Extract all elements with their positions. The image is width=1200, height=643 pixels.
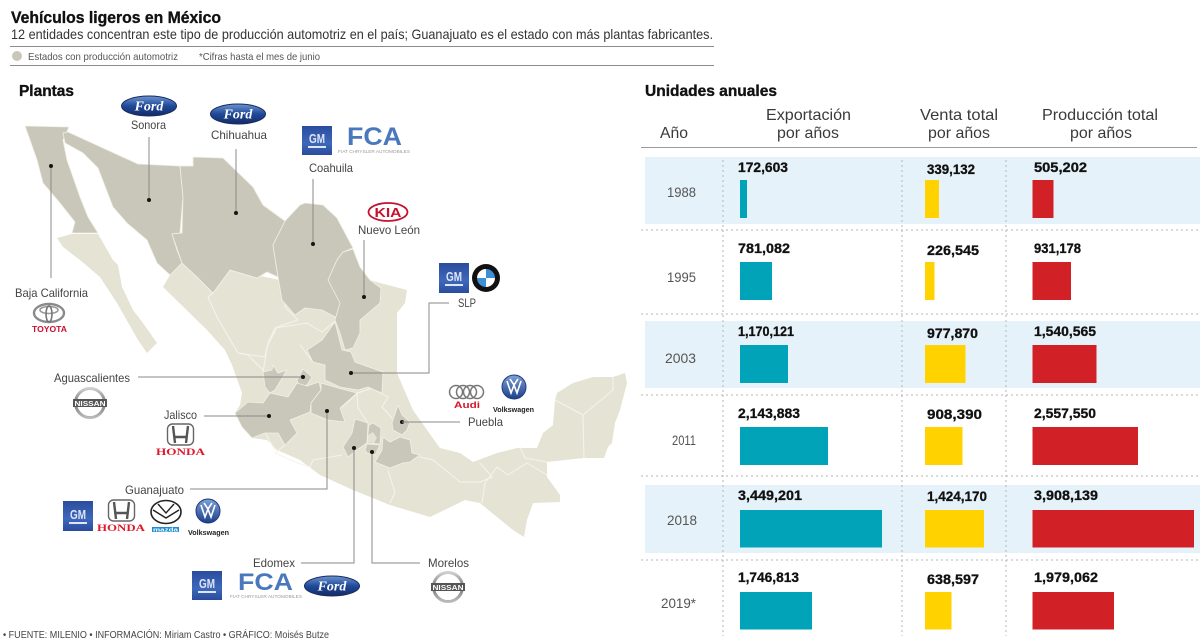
logo: GM: GM [199,576,215,591]
state: Puebla north [392,405,410,435]
logo: KIA: KIA [374,205,402,220]
export value: 1,746,813 [738,569,799,585]
callout: Sonora [122,96,176,202]
label: SLP [458,296,476,310]
logo: Ford [304,576,360,596]
sales value: 226,545 [927,242,979,258]
panel: annual units table [641,83,1200,636]
export bar [740,345,788,383]
heading: Plantas: Plantas [19,83,74,100]
footer credits: • FUENTE: MILENIO • INFORMACIÓN: Miriam Castro • GRÁFICO: Moisés Butze [3,628,329,641]
leader [190,411,327,489]
label: Chihuahua [211,128,267,142]
export bar [740,510,882,548]
state: Chihuahua [172,157,285,293]
column header: Exportación [766,107,851,142]
dot [301,375,305,379]
state: Edomex east [368,423,381,444]
logo: Nissan [73,388,107,418]
export value: 781,082 [738,240,790,256]
leader [402,421,460,423]
export value: 172,603 [738,159,788,175]
sales value: 638,597 [927,571,979,587]
logo: BMW [472,264,500,292]
mainland light states [163,263,627,537]
legend footnote: *Cifras hasta el mes de junio [199,51,320,63]
row: 2019 [661,569,1114,630]
label: Guanajuato [125,483,184,497]
production bar [1032,592,1114,630]
leader [372,452,420,563]
column header: Venta total [920,107,998,142]
dot [49,164,53,168]
logo: GM [63,501,93,531]
logo: Volkswagen: Volkswagen [493,405,534,414]
subtitle: 12 entidades concentran este tipo de producción automotriz en el país; Guanajuato es el estado con más plantas fabricantes. [11,26,713,42]
sales bar [925,262,934,300]
export bar [740,592,812,630]
year: 2011 [672,432,696,448]
callout: Aguascalientes [54,371,305,418]
column header: Exportación: por años [777,125,839,142]
row: 1988 [667,159,1087,218]
logo: Toyota: TOYOTA [32,325,67,334]
label: Nuevo León [358,223,420,237]
dot [400,420,404,424]
leader [363,240,365,297]
sales bar [925,510,984,548]
year: 2019* [661,595,697,611]
column header: Producción total: Producción total [1042,107,1158,124]
column header: Exportación: Exportación [766,107,851,124]
panel: map of plants [15,83,627,602]
logo: FCA [338,123,410,154]
logo: Nissan: NISSAN [74,401,106,408]
label: Baja California [15,286,88,300]
label: Jalisco [164,408,197,422]
row: 1995 [667,240,1081,300]
leader [148,137,150,200]
year: 1995 [667,269,696,285]
callout: Edomex [192,446,360,600]
column header: Producción total: por años [1070,125,1132,142]
column header: Venta total: Venta total [920,107,998,124]
sales value: 908,390 [927,406,982,422]
dot [349,371,353,375]
callout: Puebla [400,375,534,429]
label: Aguascalientes [54,371,130,385]
sales bar [925,345,966,383]
logo: FCA: FIAT CHRYSLER AUTOMOBILES [230,594,302,599]
state: San Luis Potosí [307,322,383,393]
production bar [1032,345,1096,383]
logo: Volkswagen: Volkswagen [188,528,229,537]
callout: Coahuila [302,123,410,246]
callout: Nuevo León [358,203,420,299]
label: Puebla [468,415,503,429]
logo: Volkswagen [188,499,229,537]
export bar [740,262,772,300]
leader [204,415,269,417]
callout: Morelos [370,450,469,602]
leader [235,149,237,213]
callout: Guanajuato [63,409,329,537]
production bar [1032,262,1071,300]
leader [312,179,314,244]
state: Edomex [343,419,368,457]
state: Aguascalientes [297,369,312,387]
dot [234,211,238,215]
legend [12,51,320,63]
logo: GM [439,263,469,293]
row: 2018 [667,487,1194,548]
column header: Año: Año [660,125,688,142]
year: 2003 [665,350,696,366]
export value: 3,449,201 [738,487,802,503]
logo: FCA: FCA [238,569,293,596]
production value: 505,202 [1034,159,1087,175]
dot [311,242,315,246]
sales bar [925,180,939,218]
state: Morelos [365,444,380,455]
production bar [1032,510,1194,548]
logo: GM: GM [309,131,325,146]
title: Vehículos ligeros en México [11,8,221,27]
year: 2018 [667,512,697,528]
sales value: 977,870 [927,325,978,341]
state: Guanajuato [311,383,357,422]
dot [147,198,151,202]
leader [351,303,449,373]
callout: Chihuahua [210,104,267,215]
logo: GM [192,571,222,600]
logo: FCA: FCA [347,123,402,151]
legend label: Estados con producción automotriz [28,51,178,63]
logo: Ford: Ford [317,580,347,594]
sales value: 1,424,170 [927,488,987,504]
logo: Mazda: mazda [153,528,178,534]
label: Morelos [428,556,469,570]
callout: Baja California [15,164,88,334]
sales bar [925,427,962,465]
logo: Nissan [431,572,465,602]
export bar [740,427,828,465]
production value: 3,908,139 [1034,487,1098,503]
production value: 1,540,565 [1034,323,1096,339]
label: Edomex [253,556,295,570]
logo: Mazda [151,500,181,534]
logo: GM: GM [446,269,462,284]
logo: Ford: Ford [223,108,253,122]
map of Mexico [25,126,627,537]
row: 2011 [672,405,1138,465]
logo: FCA [230,569,302,599]
production value: 931,178 [1034,240,1081,256]
production bar [1032,427,1138,465]
dot [267,414,271,418]
column header: Venta total: por años [928,125,990,142]
callout: Jalisco [156,408,271,457]
export value: 1,170,121 [738,323,794,339]
dot [370,450,374,454]
logo: Honda: HONDA [156,447,206,457]
state borders [182,263,613,503]
leader [50,166,52,278]
row: 2003 [665,323,1096,383]
logo: Honda [97,500,146,533]
heading: Unidades anuales: Unidades anuales [645,83,777,100]
export value: 2,143,883 [738,405,800,421]
logo: Toyota [32,304,67,334]
logo: Audi: Audi [454,400,480,410]
production bar [1032,180,1054,218]
state: Nuevo León [328,249,381,350]
Mexico City [368,432,377,443]
sales value: 339,132 [927,161,975,177]
export bar [740,180,747,218]
production value: 1,979,062 [1034,569,1098,585]
year: 1988 [667,184,696,200]
state: Sonora [63,132,183,275]
production value: 2,557,550 [1034,405,1096,421]
leader [138,376,303,378]
logo: Honda: HONDA [97,523,146,533]
state: Puebla south [375,437,420,468]
callout: SLP [349,263,500,375]
logo: Ford: Ford [134,100,164,114]
dot [362,295,366,299]
dot [352,446,356,450]
logo: FCA: FIAT CHRYSLER AUTOMOBILES [338,149,410,154]
logo: Nissan: NISSAN [432,585,464,592]
sales bar [925,592,952,630]
leader [301,448,354,563]
dot [325,409,329,413]
logo: GM: GM [70,507,86,522]
state: Coahuila [273,203,353,318]
label: Sonora [131,118,166,132]
state: Baja California Sur [57,234,157,353]
label: Coahuila [309,161,353,175]
state: Baja California [25,126,98,233]
column header: Producción total [1042,107,1158,142]
legend swatch [12,51,22,61]
state: Jalisco [235,365,321,445]
